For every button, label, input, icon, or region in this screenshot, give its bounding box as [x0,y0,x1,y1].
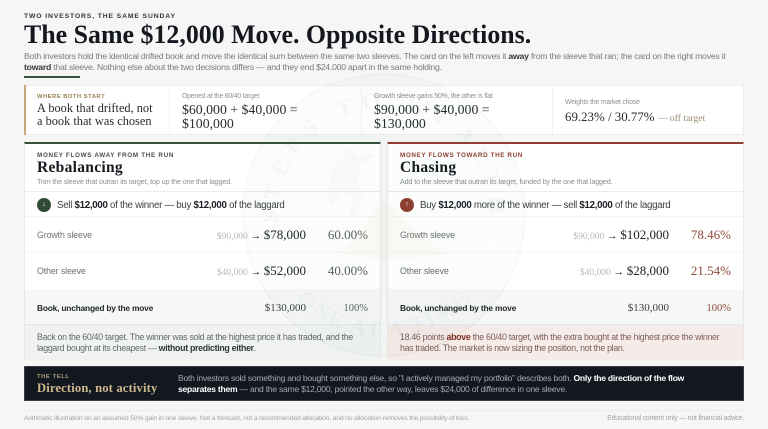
row: total: 100% [706,303,731,314]
weights: Weights the market chose [565,99,640,106]
gains: $90,000 + $40,000 = [374,102,490,117]
row: growth [388,217,743,253]
kicker: MONEY FLOWS AWAY FROM THE RUN [37,152,174,159]
row: total [25,289,380,325]
opened: $60,000 + $40,000 = [182,102,298,117]
where both start: A book that drifted, not [37,101,153,115]
row: total: Book, unchanged by the move [400,303,516,313]
row: other: 40.00% [328,263,368,278]
eyebrow: TWO INVESTORS, THE SAME SUNDAY [24,13,176,20]
title: The Same $12,000 Move. Opposite Directions. [24,20,531,49]
where both start [37,94,153,128]
callout heading: Direction, not activity [37,381,157,395]
action row [388,191,743,217]
row: growth: Growth sleeve [400,230,455,240]
panel: chasing [387,142,744,360]
note [25,325,380,360]
callout kicker: THE TELL [37,374,70,380]
callout text: separates them — and the same $12,000, pointed the other way, leaves $24,000 of difference in one sleeve. [178,384,567,394]
watermark emblem: ONE AT A TIME [292,285,476,342]
row: other: 21.54% [691,263,731,278]
heading: Chasing [400,159,456,176]
subhead: Trim the sleeve that outran its target, top up the one that lagged. [37,177,232,186]
row: growth: Growth sleeve [37,230,92,240]
row: growth: $90,000 → $102,000 [573,227,669,242]
note [388,325,743,360]
row: total [388,289,743,325]
row: growth: 60.00% [328,227,368,242]
note: has traded. The market is now sizing the position, not the plan. [400,343,625,353]
row: other: $40,000 → $28,000 [580,263,669,278]
where both start: WHERE BOTH START [37,94,105,100]
panel: starting point strip [24,85,744,135]
footer note: Educational content only — not financial advice. [607,415,744,422]
callout text [178,373,684,394]
row: growth [25,217,380,253]
action row [25,191,380,217]
weights: 69.23% / 30.77% — off target [565,110,705,124]
watermark emblem [243,74,525,356]
footer divider [24,410,744,411]
row: growth: 78.46% [691,227,731,242]
row: total: 100% [344,303,368,314]
accent rule [24,76,80,78]
heading: Rebalancing [37,159,123,176]
icon: down arrow: ↓ [42,201,46,208]
callout: the tell [24,366,744,401]
opened: $100,000 [182,116,234,131]
row: other [37,263,368,278]
note: 18.46 points above the 60/40 target, with the extra bought at the highest price the winner [400,332,719,342]
callout text: Both investors sold something and bought something else, so "I actively managed my portfolio" describes both. Only the direction of the flow [178,373,684,383]
gains [361,86,552,134]
icon: down arrow [37,198,51,212]
gains: Growth sleeve gains 50%, the other is flat [374,93,493,100]
icon: up arrow [400,198,414,212]
footer disclaimer: Arithmetic illustration on an assumed 50% gain in one sleeve. Not a forecast, not a recommended allocation, and no allocation removes the possibility of loss. [24,415,469,422]
action text: Buy $12,000 more of the winner — sell $12,000 of the laggard [420,200,670,211]
intro text: toward that sleeve. Nothing else about the two decisions differs — and they end $24,000 apart in the same holding. [24,62,442,72]
watermark emblem: STEPS TO WEALTH [258,88,510,223]
icon: up arrow: ↑ [405,201,409,208]
row: total: $130,000 [628,302,669,314]
gains: $130,000 [374,116,426,131]
intro text: Both investors hold the identical drifted book and move the identical sum between the same two sleeves. The card on the left moves it away from the sleeve that ran; the card on the right moves it [24,51,726,61]
weights [552,86,743,134]
row: other [400,263,731,278]
intro text [24,51,726,72]
accent bar [24,85,26,135]
opened: Opened at the 60/40 target [182,93,259,100]
panel: rebalancing [24,142,381,360]
kicker: MONEY FLOWS TOWARD THE RUN [400,152,523,159]
note: Back on the 60/40 target. The winner was sold at the highest price it has traded, and the [37,332,353,342]
note: laggard bought at its cheapest — without predicting either. [37,343,256,353]
row: other: Other sleeve [400,266,449,276]
action text: Sell $12,000 of the winner — buy $12,000 of the laggard [57,200,285,211]
row: total: Book, unchanged by the move [37,303,153,313]
opened [169,86,361,134]
where both start: a book that was chosen [37,114,152,128]
row: other: $40,000 → $52,000 [217,263,306,278]
subhead: Add to the sleeve that outran its target, funded by the one that lagged. [400,177,612,186]
row: other: Other sleeve [37,266,86,276]
row: total: $130,000 [265,302,306,314]
row: growth: $90,000 → $78,000 [217,227,306,242]
